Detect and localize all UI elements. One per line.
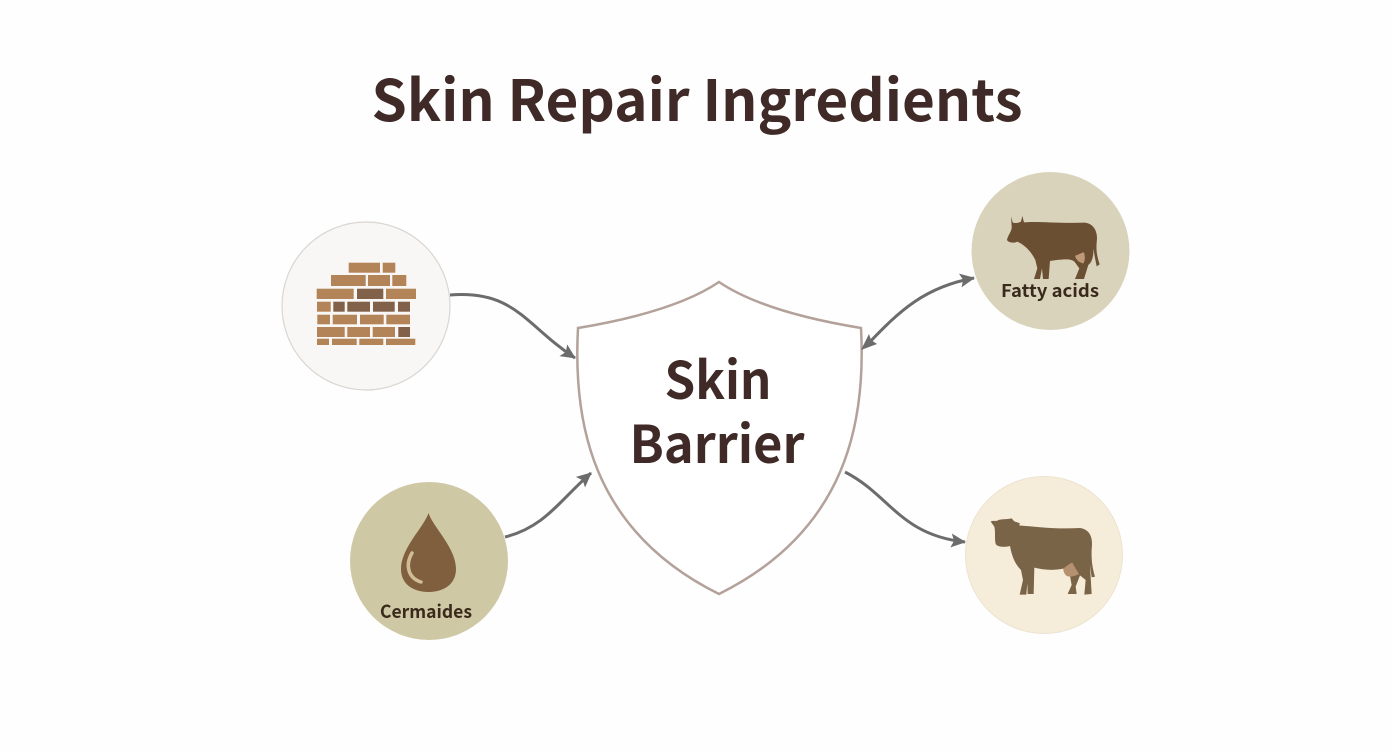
arrowhead: shield end of two-way arrow	[861, 334, 877, 350]
arrow: shield to cow circle	[845, 472, 965, 542]
circle: cow	[966, 476, 1122, 634]
arrow: shield and fatty acids two-way	[866, 278, 974, 346]
icon: oil drop	[401, 513, 456, 592]
arrow: bricks to shield	[450, 295, 575, 358]
shield label: Skin	[664, 339, 772, 414]
icon: udder	[1063, 563, 1079, 577]
shield label	[630, 339, 805, 478]
icon: udder	[1075, 252, 1085, 263]
shield label: Barrier	[630, 403, 805, 478]
circle: bricks	[282, 222, 450, 390]
icon: cow	[1007, 216, 1100, 279]
label: Fatty acids: Fatty acids	[1001, 278, 1099, 303]
circle: fatty acids	[972, 172, 1130, 330]
label: Cermaides: Cermaides	[380, 598, 472, 624]
shield: skin barrier	[577, 282, 862, 594]
title: Skin Repair Ingredients	[372, 56, 1022, 138]
arrow: ceramides to shield	[505, 473, 591, 537]
circle: ceramides	[350, 482, 508, 640]
icon: brick wall	[317, 263, 416, 345]
icon: cow	[991, 518, 1095, 595]
